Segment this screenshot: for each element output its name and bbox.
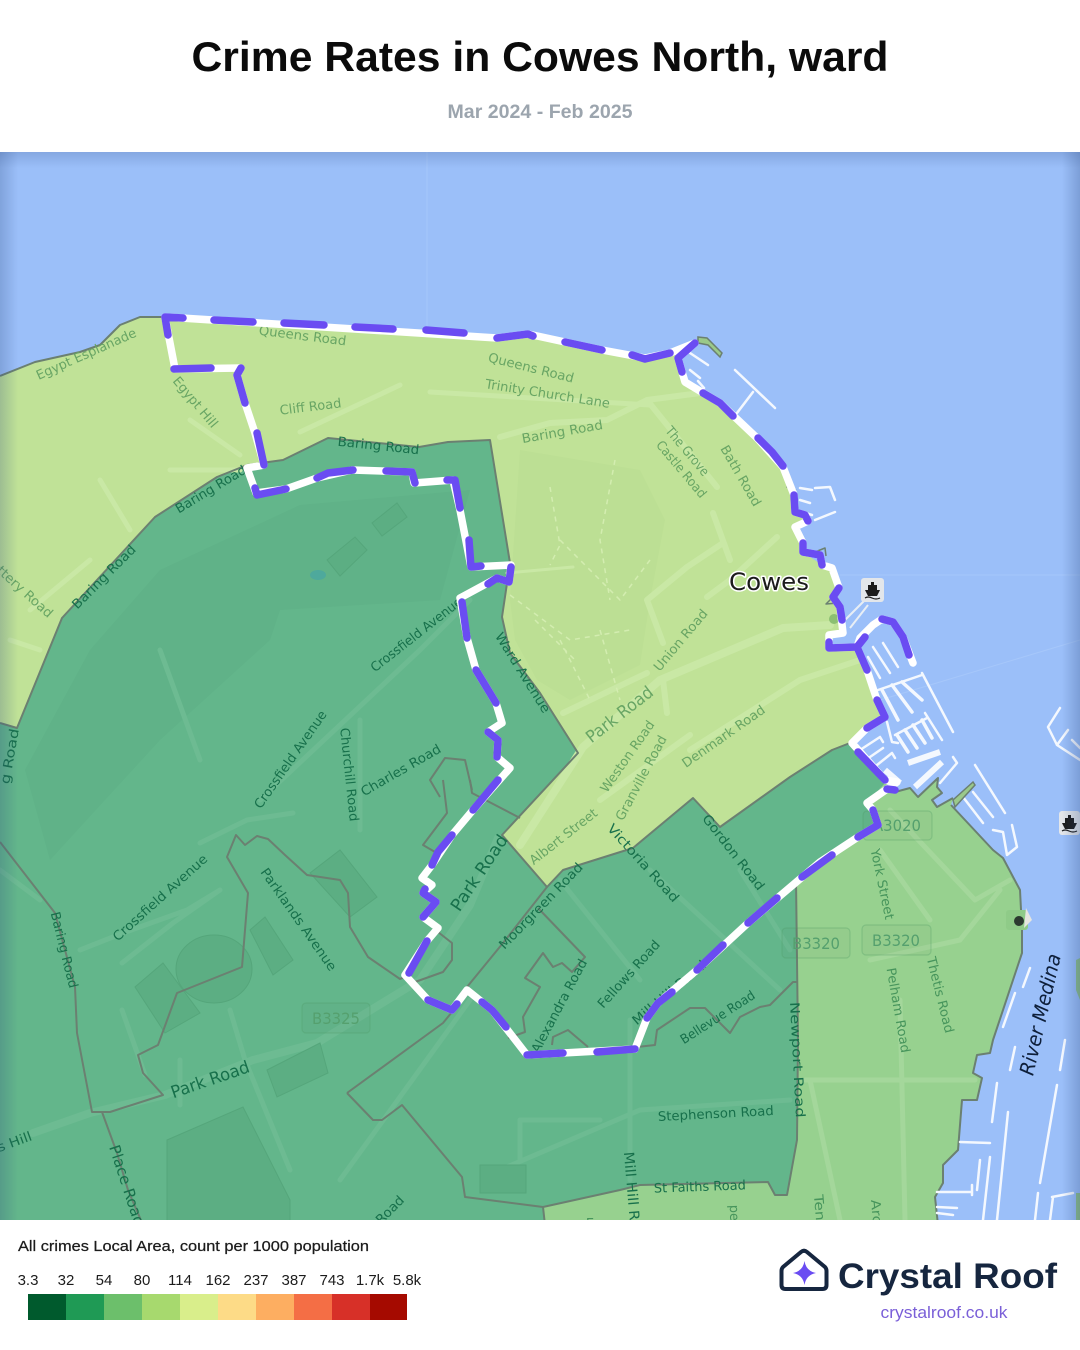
road labels on medium zone (586, 847, 956, 1232)
darker woodland shade (25, 490, 470, 860)
road labels on dark zone: Crossfield Avenue (252, 708, 331, 812)
roads on dark zone (0, 600, 790, 1180)
road labels on light zone: Trinity Church Lane (483, 377, 611, 412)
legend colour swatches (28, 1294, 407, 1320)
legend scale labels: 114 (168, 1272, 192, 1289)
road labels on light zone: Union Road (651, 607, 711, 675)
legend scale labels: 387 (281, 1272, 307, 1289)
map edge shading: right (1064, 152, 1080, 1220)
road labels on dark zone: Crossfield Avenue (110, 852, 211, 945)
road labels on light zone: Bath Road (717, 443, 764, 509)
road labels on dark zone: Stephenson Road (658, 1104, 774, 1125)
area borders (0, 317, 1022, 1225)
road labels on dark zone: Gordon Road (699, 812, 767, 894)
road labels on dark zone: Victoria Road (604, 821, 682, 906)
road labels on dark zone: Baring Road (47, 910, 80, 990)
road labels on light zone: Castle Road (652, 438, 709, 501)
legend scale labels (18, 1272, 422, 1289)
road labels on dark zone: Moorgreen Road (496, 860, 586, 953)
legend title: All crimes Local Area, count per 1000 population (18, 1238, 369, 1255)
harbour pontoons and jetties (690, 353, 1080, 1220)
road labels on light zone (0, 324, 768, 868)
legend scale labels: 5.8k (393, 1272, 422, 1289)
parks and pitches (135, 503, 526, 1225)
road labels on light zone: Egypt Esplanade (34, 326, 139, 384)
road labels on dark zone: Road (373, 1193, 408, 1228)
road labels on dark zone: Alexandra Road (529, 957, 591, 1056)
water (0, 152, 1080, 1220)
road shield numbers (312, 816, 921, 1028)
road labels on medium zone: York Street (866, 847, 896, 921)
icon: floating bridge landing (1014, 908, 1032, 930)
park in light zone (510, 450, 665, 700)
map edge shading: top (0, 152, 1080, 162)
legend scale labels: 32 (58, 1272, 74, 1289)
marina quay block (885, 752, 942, 787)
road labels on dark zone: Place Road (105, 1143, 148, 1228)
road labels on dark zone: Churchill Road (336, 727, 361, 822)
place label: Cowes: Cowes (729, 568, 809, 596)
ward boundary: white base line (165, 317, 913, 1055)
road labels on light zone: Weston Road (598, 718, 658, 796)
road labels on medium zone: Thetis Road (922, 955, 956, 1035)
road labels on dark zone: Parklands Avenue (257, 866, 339, 974)
road labels on dark zone: Mill Hill Road (630, 958, 710, 1029)
brand url: crystalroof.co.uk (880, 1303, 1008, 1322)
road shield numbers: B3325 (312, 1009, 360, 1028)
choropleth area: light yellow-green zone (0, 317, 885, 887)
road labels on dark zone: Charles Road (359, 742, 444, 800)
road labels on dark zone: Baring Road (337, 435, 420, 458)
roads on medium zone (805, 810, 1010, 1220)
pond (310, 570, 326, 580)
road labels on medium zone: Ten (810, 1193, 827, 1221)
brand name: Crystal Roof (838, 1257, 1057, 1296)
road labels on light zone: Granville Road (613, 733, 671, 823)
road labels on medium zone: pe (726, 1205, 741, 1221)
road shields (302, 811, 932, 1033)
road labels on light zone: Denmark Road (680, 703, 768, 771)
road labels on light zone: Albert Street (527, 806, 601, 868)
road labels on dark zone: Park Road (168, 1057, 252, 1103)
road labels on light zone: Queens Road (486, 351, 575, 387)
road labels on dark zone: Fellows Road (595, 938, 664, 1012)
road labels on dark zone: Baring Road (70, 543, 140, 613)
patches on far bank (1076, 958, 1080, 1220)
ward boundary: purple dashes (165, 317, 909, 1055)
road labels on light zone: Cliff Road (279, 396, 342, 419)
legend scale labels: 3.3 (18, 1272, 38, 1289)
road labels on light zone: Egypt Hill (169, 374, 220, 431)
roads on light zone (10, 385, 860, 845)
road labels on medium zone: E (586, 1217, 594, 1232)
road labels on medium zone: Arc (867, 1199, 884, 1224)
road labels on dark zone: Baring Road (173, 463, 249, 517)
icon: ferry terminal (861, 578, 884, 602)
road shield numbers: B3320 (792, 934, 840, 953)
choropleth area: medium green zone (543, 778, 1022, 1225)
subtitle: date range: Mar 2024 - Feb 2025 (448, 102, 633, 123)
legend scale labels: 1.7k (356, 1272, 385, 1289)
road labels on dark zone: Bellevue Road (678, 988, 758, 1048)
park footpaths (510, 460, 650, 700)
road labels on light zone: The Grove (661, 423, 712, 480)
harbour-side garden (829, 614, 839, 624)
legend scale labels: 80 (134, 1272, 150, 1289)
road labels on light zone: Baring Road (521, 418, 604, 447)
road labels on dark zone: Newport Road (786, 1002, 807, 1118)
road labels on medium zone: Pelham Road (883, 967, 912, 1054)
road labels on dark zone: St Faiths Road (654, 1178, 746, 1197)
jetty south of breakwater (953, 782, 975, 807)
road labels on dark zone: Park Road (447, 831, 513, 915)
road shield numbers: B3320 (872, 931, 920, 950)
legend scale labels: 162 (205, 1272, 231, 1289)
water label: River Medina: River Medina (1015, 951, 1066, 1078)
legend scale labels: 54 (96, 1272, 112, 1289)
legend (18, 1238, 422, 1320)
road labels on light zone: Park Road (582, 683, 658, 748)
icon: house with star (782, 1251, 826, 1289)
title: Crime Rates in Cowes North, ward (192, 33, 888, 80)
brand logo (782, 1251, 1057, 1322)
choropleth area: dark green low-crime zones (0, 438, 886, 1225)
road labels on dark zone: Ward Avenue (491, 630, 553, 716)
ferry terminal ramp (845, 600, 868, 628)
legend scale labels: 743 (319, 1272, 345, 1289)
icon: ferry terminal east bank (1059, 811, 1080, 835)
breakwater (698, 337, 722, 357)
road labels on dark zone (0, 435, 807, 1248)
road labels on light zone: Queens Road (258, 324, 347, 349)
map edge shading: left (0, 152, 14, 1220)
road labels on dark zone: Mill Hill Road (620, 1151, 644, 1248)
legend scale labels: 237 (243, 1272, 269, 1289)
road shield numbers: A3020 (873, 816, 921, 835)
road labels on dark zone: Crossfield Avenue (368, 595, 466, 676)
